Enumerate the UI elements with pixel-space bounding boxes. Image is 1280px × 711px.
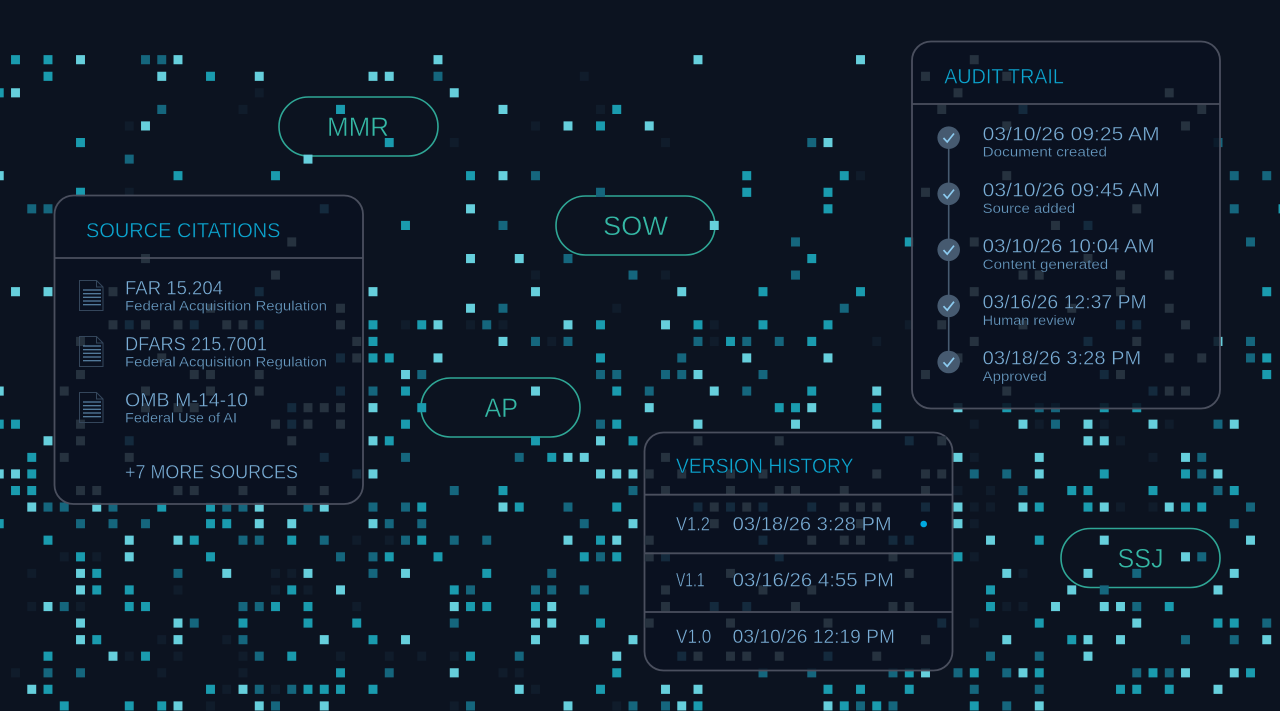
pill: AP [421, 378, 580, 437]
audit entry: content generated [937, 236, 1155, 272]
audit entry: human review: 03/16/26 12:37 PM [983, 292, 1147, 313]
source: FAR 15.204: Federal Acquisition Regulation [125, 299, 327, 314]
pixel grid: dimmed squares behind panels [64, 60, 1202, 656]
source: OMB M-14-10: OMB M-14-10 [125, 390, 248, 411]
heading: audit trail: AUDIT TRAIL [944, 65, 1064, 88]
source: DFARS 215.7001 [125, 334, 327, 370]
audit entry: human review [937, 292, 1147, 328]
version row: V1.0: V1.0 [676, 627, 711, 648]
audit entry: document created [937, 124, 1160, 160]
pixel grid: faint squares [16, 76, 1169, 706]
pixel grid: dimmed blue squares behind panels [129, 109, 1153, 656]
panel: source citations [55, 220, 363, 483]
version row: V1.2: V1.2 [676, 514, 710, 535]
pill: AP: AP [484, 393, 518, 423]
version row: V1.2: 03/18/26 3:28 PM [733, 514, 892, 535]
audit entry: approved: 03/18/26 3:28 PM [983, 348, 1141, 369]
version row: V1.2 [676, 514, 927, 535]
audit entry: source added: Source added [983, 201, 1075, 216]
audit entry: approved [937, 348, 1141, 384]
heading: version history: VERSION HISTORY [676, 455, 854, 478]
icon: document [80, 392, 103, 422]
pill: MMR [279, 97, 438, 156]
source: FAR 15.204 [125, 278, 327, 314]
pill: MMR: MMR [327, 112, 389, 142]
pill: SSJ [1061, 528, 1220, 588]
pill: SOW: SOW [603, 211, 669, 241]
pill: SOW [556, 196, 715, 255]
audit entry: content generated: 03/10/26 10:04 AM [983, 236, 1155, 257]
audit entry: content generated: Content generated [983, 257, 1108, 272]
version row: V1.0: 03/10/26 12:19 PM [733, 627, 895, 648]
heading: source citations: SOURCE CITATIONS [86, 220, 280, 242]
pill: SSJ: SSJ [1118, 544, 1164, 574]
audit entry: approved: Approved [983, 369, 1047, 384]
audit entry: source added [937, 180, 1160, 216]
version row: V1.1: V1.1 [676, 571, 705, 592]
source: OMB M-14-10 [125, 390, 248, 426]
audit entry: document created: Document created [983, 145, 1107, 160]
icon: document [80, 280, 103, 310]
source: DFARS 215.7001: Federal Acquisition Regulation [125, 355, 327, 370]
panel: audit trail [912, 65, 1220, 384]
panel: version history [645, 455, 953, 648]
more sources link: +7 MORE SOURCES [125, 462, 298, 483]
version row: V1.1: 03/16/26 4:55 PM [733, 571, 894, 592]
audit entry: document created: 03/10/26 09:25 AM [983, 124, 1160, 145]
timeline connector [948, 138, 950, 362]
source: DFARS 215.7001: DFARS 215.7001 [125, 334, 267, 355]
icon: document [80, 336, 103, 366]
source: OMB M-14-10: Federal Use of AI [125, 411, 237, 426]
audit entry: human review: Human review [983, 313, 1075, 328]
source: FAR 15.204: FAR 15.204 [125, 278, 223, 299]
version row: V1.1 [676, 571, 894, 592]
audit entry: source added: 03/10/26 09:45 AM [983, 180, 1160, 201]
